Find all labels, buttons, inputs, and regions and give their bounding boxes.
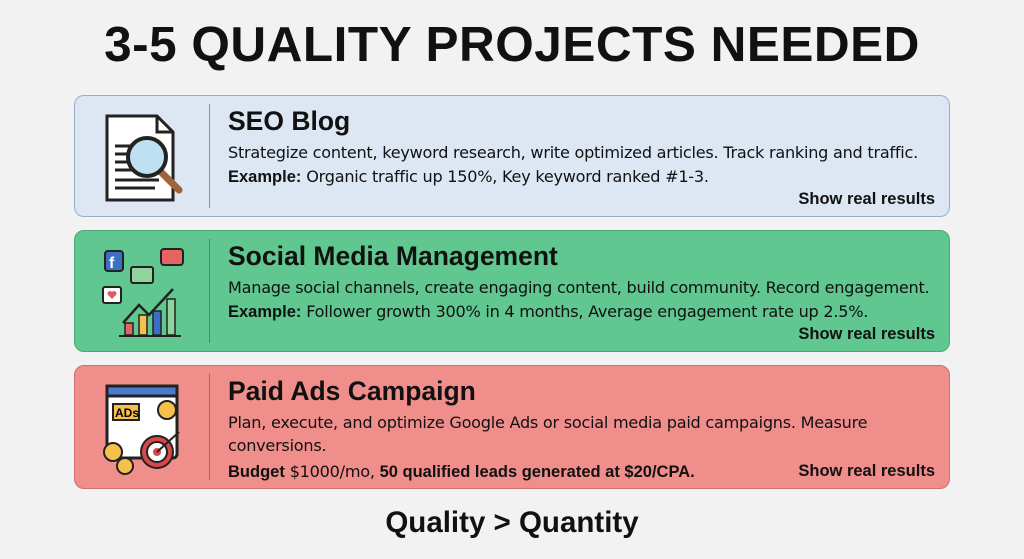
- text: Example: Follower growth 300% in 4 months, Average engagement rate up 2.5%.: [228, 302, 868, 321]
- text: [228, 413, 867, 481]
- text: Plan, execute, and optimize Google Ads or social media paid campaigns. Measure: [228, 413, 867, 432]
- icon: social chart: f: [109, 255, 115, 272]
- text: Example: Organic traffic up 150%, Key keyword ranked #1-3.: [228, 167, 709, 186]
- panel: Paid Ads: [74, 365, 950, 489]
- title: 3-5 QUALITY PROJECTS NEEDED: [104, 17, 920, 72]
- label: Show real results: [798, 462, 935, 480]
- text: conversions.: [228, 436, 326, 455]
- label: Show real results: [798, 190, 935, 208]
- label: Show real results: [798, 325, 935, 343]
- text: Manage social channels, create engaging content, build community. Record engagement.: [228, 278, 929, 297]
- text: [228, 143, 918, 186]
- text: Budget $1000/mo, 50 qualified leads generated at $20/CPA.: [228, 462, 695, 481]
- panel: SEO Blog: [74, 95, 950, 217]
- icon: ads target: ADs: [115, 406, 139, 420]
- text: [228, 278, 929, 321]
- footer: Quality > Quantity: [385, 506, 639, 539]
- heading: Paid Ads Campaign: [228, 376, 476, 406]
- icon: document with magnifier: [106, 114, 182, 202]
- panel: Social Media: [74, 230, 950, 352]
- icon: ads target: [103, 384, 180, 475]
- heading: Social Media Management: [228, 241, 558, 271]
- icon: social chart: [102, 248, 184, 337]
- text: Strategize content, keyword research, write optimized articles. Track ranking and traffic.: [228, 143, 918, 162]
- heading: SEO Blog: [228, 106, 350, 136]
